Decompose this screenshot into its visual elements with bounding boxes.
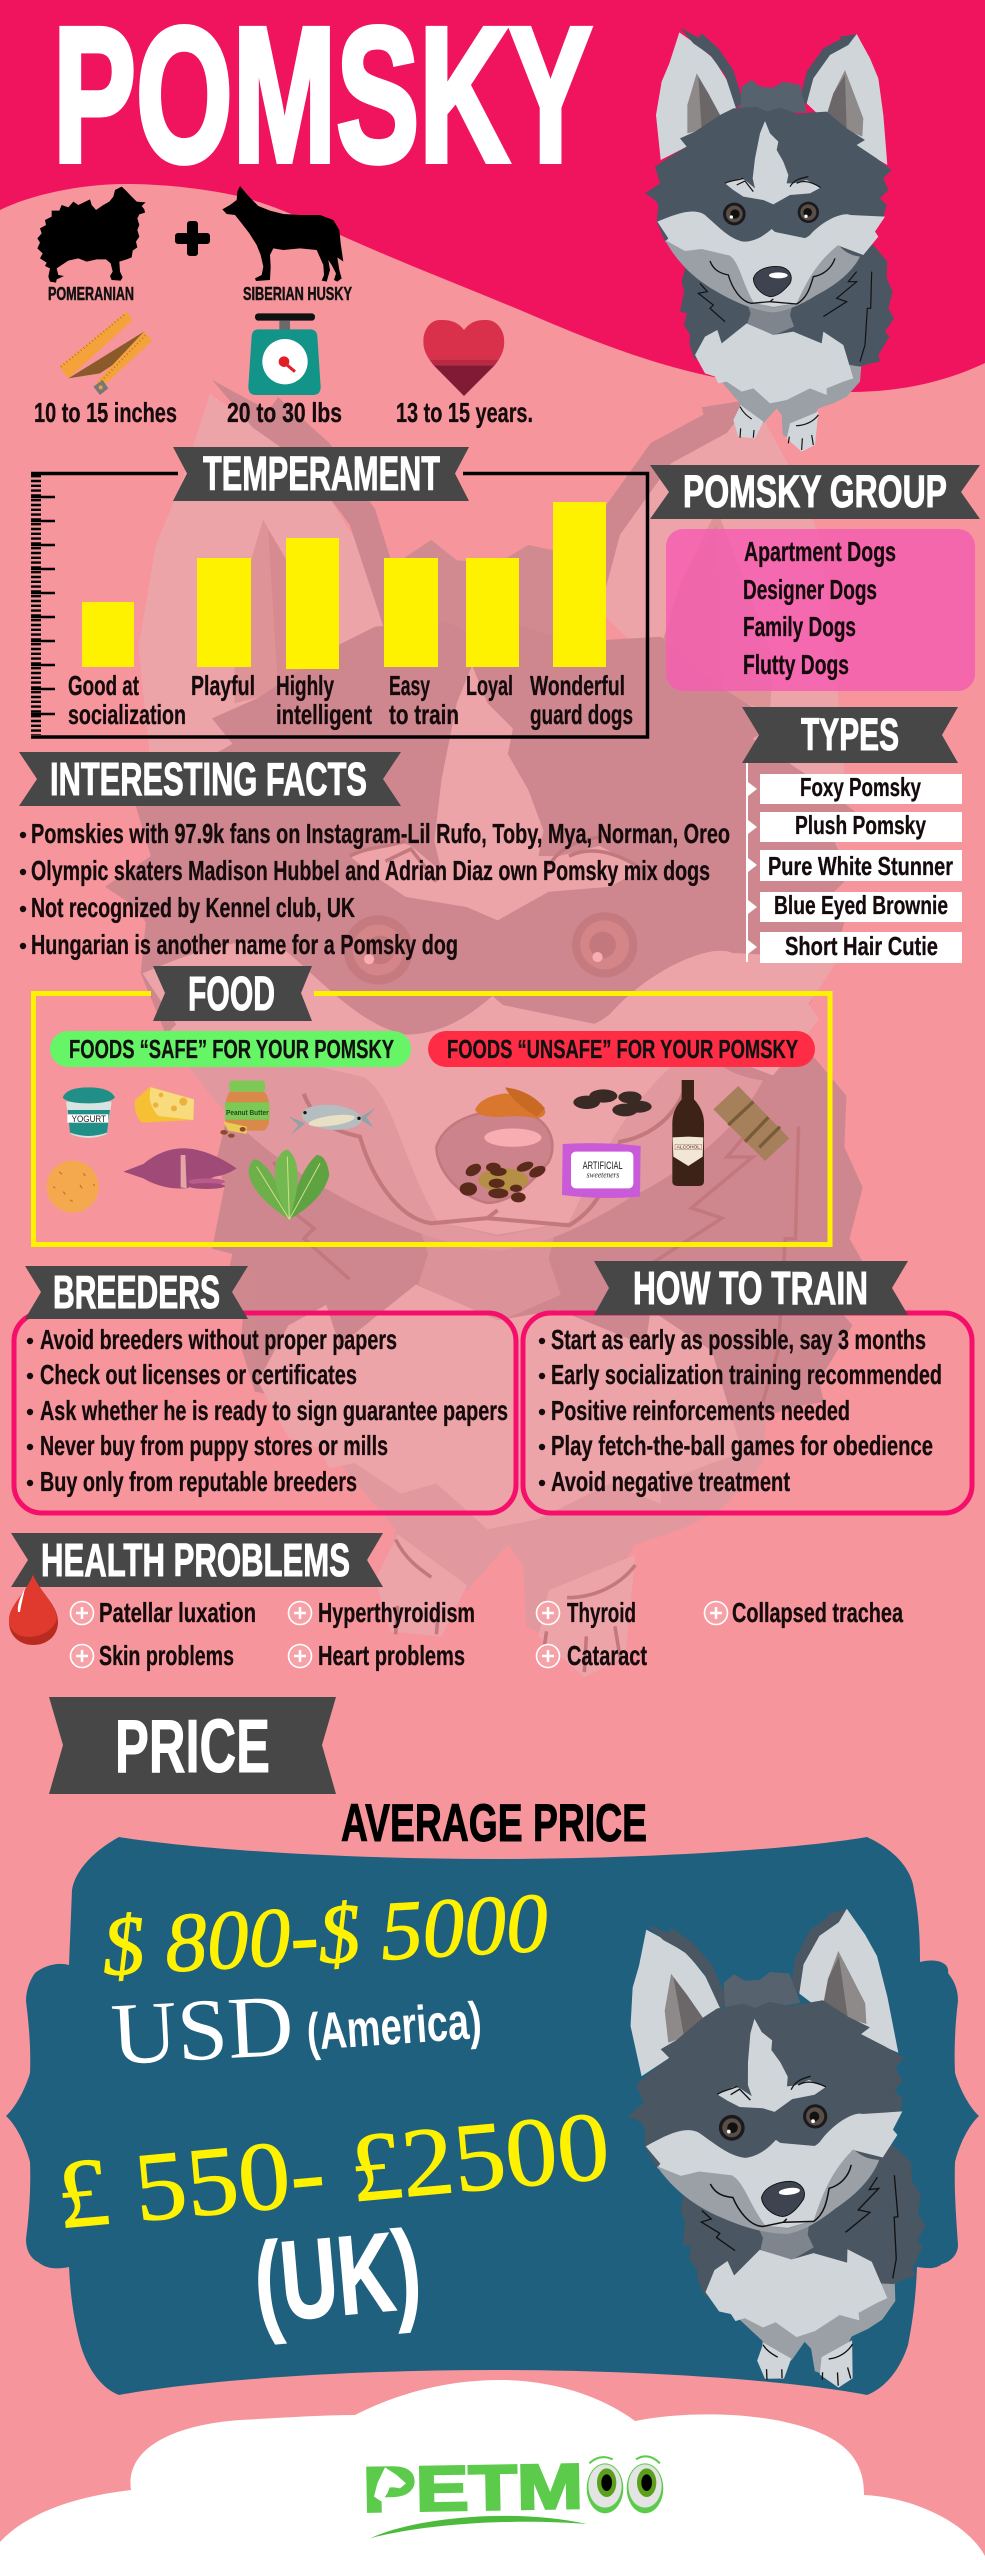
logo: petmoo — [362, 2452, 663, 2538]
group list box — [666, 529, 975, 691]
panel: how to train — [523, 1261, 972, 1513]
group list: Flutty Dogs — [743, 649, 849, 680]
panel: pomsky group — [650, 465, 980, 691]
bar labels: Loyal — [466, 670, 513, 701]
icon: cheese — [135, 1087, 194, 1123]
bar labels: to train — [389, 699, 459, 730]
type labels: Foxy Pomsky — [800, 772, 921, 802]
health labels: Collapsed trachea — [732, 1597, 903, 1628]
type labels: Plush Pomsky — [795, 810, 926, 840]
icon: almonds — [475, 1087, 545, 1118]
heading: breeders — [25, 1266, 248, 1319]
bar labels: Good at — [68, 670, 139, 701]
icon: spinach — [248, 1150, 329, 1219]
unsafe foods pill — [428, 1031, 815, 1067]
price uk: £ 550- £2500 — [52, 2092, 614, 2250]
icon: artificial sweeteners: ARTIFICIAL — [583, 1160, 623, 1172]
logo swoosh — [370, 2516, 587, 2538]
heading: how to train: HOW TO TRAIN — [633, 1262, 868, 1314]
safe food icons — [47, 1081, 375, 1219]
icon: fish — [288, 1102, 375, 1135]
label: lifespan: 13 to 15 years. — [396, 397, 533, 428]
panel: food — [34, 966, 830, 1244]
group list: Apartment Dogs — [744, 536, 896, 567]
logo wordmark: PETM — [362, 2452, 584, 2526]
train list: Positive reinforcements needed — [551, 1395, 850, 1426]
bar labels — [68, 670, 633, 730]
region uk: (UK) — [249, 2207, 425, 2346]
bar labels: guard dogs — [530, 699, 633, 730]
facts list — [20, 818, 730, 960]
logo dog head cutout — [374, 2467, 406, 2502]
facts list: Not recognized by Kennel club, UK — [31, 892, 355, 923]
icon: coffee beans — [573, 1089, 652, 1116]
bar labels: Easy — [389, 670, 430, 701]
train box — [523, 1313, 972, 1513]
bar chart — [82, 502, 606, 669]
health labels: Heart problems — [318, 1640, 465, 1671]
icon: peanut butter — [220, 1081, 269, 1138]
heading: types — [742, 707, 958, 763]
facts list: Pomskies with 97.9k fans on Instagram-Lil Rufo, Toby, Mya, Norman, Oreo — [31, 818, 730, 849]
train list — [539, 1324, 942, 1497]
health labels — [99, 1597, 903, 1671]
health labels: Patellar luxation — [99, 1597, 256, 1628]
bar labels: Wonderful — [530, 670, 625, 701]
icon: tape measure — [59, 312, 152, 395]
bar labels: Highly — [276, 670, 334, 701]
icon: siberian husky silhouette — [222, 186, 343, 282]
logo eyes — [587, 2456, 663, 2513]
health labels: Cataract — [567, 1640, 647, 1671]
icons: plus markers — [70, 1602, 728, 1668]
type labels: Short Hair Cutie — [785, 931, 938, 961]
breeders list: Buy only from reputable breeders — [40, 1466, 357, 1497]
unsafe food icons — [460, 1080, 789, 1202]
magenta header wave — [0, 0, 985, 392]
icon: blood drop — [9, 1575, 58, 1645]
safe foods pill: FOODS “SAFE” FOR YOUR POMSKY — [69, 1034, 394, 1064]
heading: price — [49, 1697, 336, 1794]
health items — [70, 1597, 903, 1671]
icon: pumpkin ball — [47, 1161, 99, 1213]
panel: temperament chart — [31, 447, 648, 737]
health labels: Thyroid — [567, 1597, 636, 1628]
panel: types — [742, 707, 962, 963]
health labels: Skin problems — [99, 1640, 234, 1671]
heading: price: PRICE — [115, 1704, 270, 1788]
icon: heart — [423, 320, 504, 396]
facts list: Hungarian is another name for a Pomsky dog — [31, 929, 458, 960]
breeders list: Never buy from puppy stores or mills — [40, 1430, 388, 1461]
icon: plus sign — [175, 221, 210, 256]
facts list: Olympic skaters Madison Hubbel and Adrian Diaz own Pomsky mix dogs — [31, 855, 710, 886]
heading: food: FOOD — [188, 968, 275, 1021]
bar labels: intelligent — [276, 699, 372, 730]
label: pomeranian: POMERANIAN — [48, 283, 134, 304]
region america: (America) — [305, 1992, 483, 2062]
watermark: large faded dog — [105, 380, 867, 1677]
train list: Avoid negative treatment — [551, 1466, 790, 1497]
heading: temperament: TEMPERAMENT — [203, 448, 440, 501]
panel: health problems — [9, 1533, 903, 1671]
icon: alcohol bottle — [672, 1080, 704, 1186]
icon: sweet potato — [123, 1148, 237, 1189]
heading: types: TYPES — [801, 709, 899, 760]
icon: chocolate bar — [713, 1086, 789, 1161]
food frame — [34, 994, 830, 1244]
breeders list — [27, 1324, 508, 1497]
icon: yogurt — [63, 1087, 115, 1138]
heading: health problems — [11, 1533, 383, 1587]
subheading: average price: AVERAGE PRICE — [341, 1794, 647, 1853]
icon: pomsky dog illustration price — [607, 1897, 943, 2408]
icon: raisins — [460, 1160, 547, 1202]
group list: Family Dogs — [743, 611, 856, 642]
icon: peanut butter: Peanut Butter — [226, 1110, 269, 1117]
panel: price — [6, 1697, 979, 2408]
panel: interesting facts — [19, 752, 730, 960]
group list — [743, 536, 896, 680]
breeders list: Check out licenses or certificates — [40, 1359, 357, 1390]
panel: size weight lifespan — [34, 312, 533, 428]
icon: pomeranian silhouette — [37, 187, 146, 283]
icon: artificial sweeteners — [562, 1143, 641, 1198]
timeline line and markers — [746, 763, 757, 962]
type boxes — [760, 774, 962, 963]
group list: Designer Dogs — [743, 574, 877, 605]
breeders list: Ask whether he is ready to sign guarantee papers — [40, 1395, 508, 1426]
health labels: Hyperthyroidism — [318, 1597, 475, 1628]
footer cloud — [0, 2380, 985, 2560]
heading: temperament — [173, 447, 469, 501]
type labels — [768, 772, 953, 961]
chart frame and axis — [31, 474, 648, 737]
heading: interesting facts — [19, 752, 401, 806]
price usd: $ 800-$ 5000 — [100, 1876, 550, 1994]
panel: parent breeds — [37, 186, 352, 304]
currency usd: USD — [109, 1978, 296, 2084]
bar labels: socialization — [68, 699, 186, 730]
safe foods pill — [50, 1031, 411, 1067]
label: weight: 20 to 30 lbs — [227, 397, 342, 428]
label: siberian husky: SIBERIAN HUSKY — [243, 283, 352, 304]
heading: interesting facts: INTERESTING FACTS — [50, 753, 367, 805]
icon: yogurt: YOGURT — [72, 1114, 106, 1124]
bar labels: Playful — [191, 670, 255, 701]
heading: food — [153, 966, 312, 1021]
breeders box — [14, 1313, 516, 1513]
icon: artificial sweeteners: sweeteners — [587, 1170, 619, 1179]
price plaque — [6, 1837, 979, 2395]
panel: breeders — [14, 1266, 516, 1513]
breeders list: Avoid breeders without proper papers — [40, 1324, 397, 1355]
unsafe foods pill: FOODS “UNSAFE” FOR YOUR POMSKY — [447, 1034, 798, 1064]
label: height: 10 to 15 inches — [34, 397, 177, 428]
heading: health problems: HEALTH PROBLEMS — [41, 1534, 350, 1586]
icon: pomsky dog illustration top — [645, 28, 894, 452]
heading: breeders: BREEDERS — [53, 1266, 220, 1318]
icon: alcohol bottle: ALCOHOL — [677, 1145, 701, 1150]
icon: weighing scale — [248, 313, 321, 395]
